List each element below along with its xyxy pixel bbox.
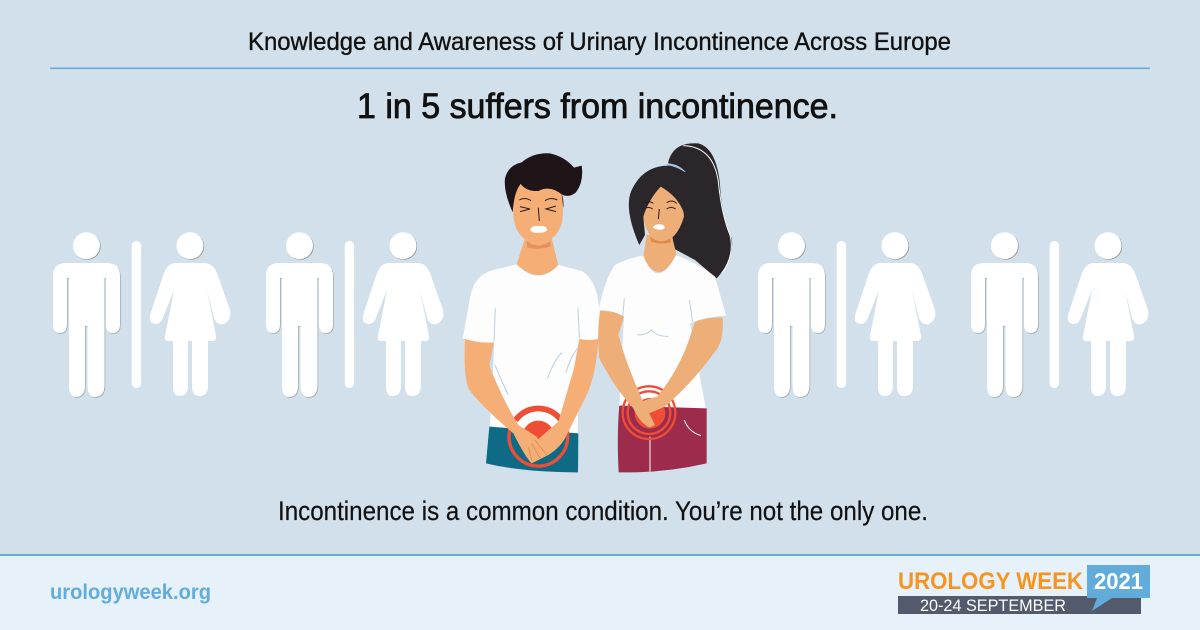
logo: Urology Week 2021: 20-24 SEPTEMBER [920,596,1066,615]
pain rings [623,386,675,439]
footer band [0,554,1200,630]
white shirt [599,255,726,409]
logo: Urology Week 2021 [898,565,1150,615]
icon: man and woman pair 2 [266,232,443,398]
arms and hands [465,339,548,463]
ponytail [668,143,732,278]
hair front [629,166,700,245]
icon: man and woman pair 4 [971,232,1148,398]
icon: man and woman pair 3 [758,232,935,398]
website link: urologyweek.org [50,581,211,604]
title: Knowledge and Awareness of Urinary Incontinence Across Europe [248,28,951,56]
shorts [486,427,578,472]
logo: Urology Week 2021: UROLOGY WEEK [898,568,1084,595]
caption: Incontinence is a common condition. You’re not the only one. [278,496,928,526]
icon: man and woman pair 1 [53,232,230,398]
woman figure [598,143,732,472]
pain rings [509,407,568,466]
logo: Urology Week 2021: 2021 [1094,568,1143,594]
arms and hands [598,311,655,428]
man figure [463,153,603,472]
heading: 1 in 5 suffers from incontinence. [357,87,838,126]
illustration: couple in discomfort [463,143,732,472]
shorts [618,406,707,472]
